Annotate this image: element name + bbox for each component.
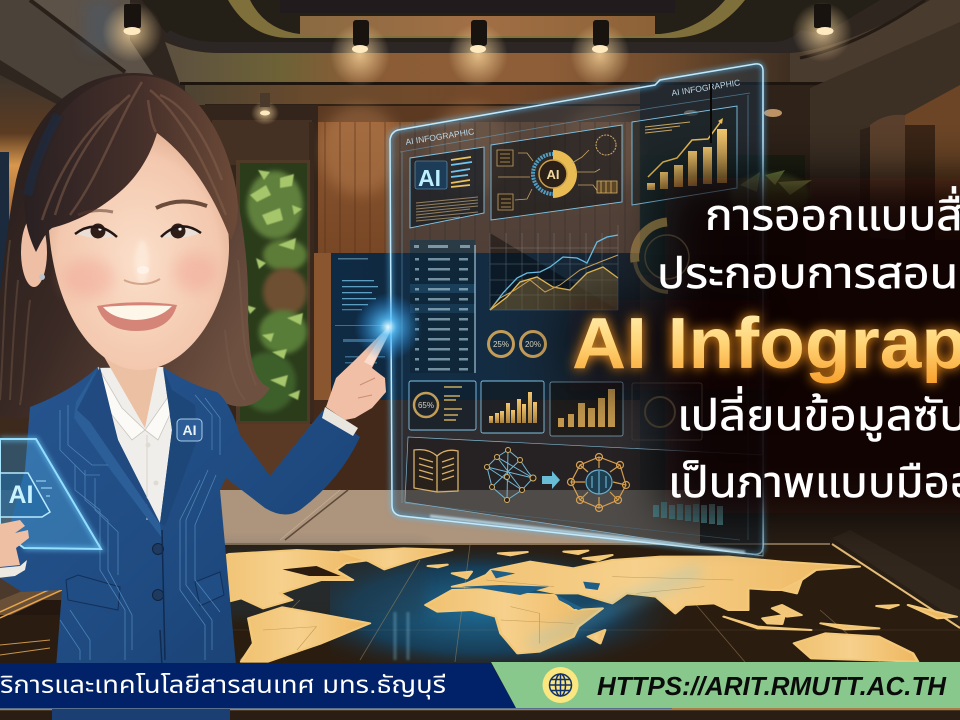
panel: website bbox=[491, 662, 960, 708]
world map bbox=[205, 530, 960, 663]
AI badge: AI bbox=[182, 422, 196, 438]
circuit pattern bbox=[60, 395, 220, 660]
fringe bbox=[25, 76, 238, 252]
pockets bbox=[66, 575, 120, 610]
donut gauges bbox=[488, 332, 546, 356]
icon: brain network bbox=[568, 454, 630, 512]
icon: globe bbox=[542, 667, 578, 703]
dim ring gauge bbox=[632, 222, 702, 440]
large wall screen bbox=[331, 253, 651, 400]
data table bbox=[410, 240, 475, 373]
panel: AI summary: AI bbox=[418, 165, 441, 191]
floor bbox=[0, 490, 960, 720]
panel: donut stat bbox=[409, 381, 476, 430]
presenter bbox=[0, 73, 422, 720]
dashboard labels: AI INFOGRAPHIC bbox=[671, 77, 741, 98]
pointing hand bbox=[322, 327, 390, 436]
panel: AI core diagram: AI bbox=[546, 167, 560, 182]
bottom process strip bbox=[405, 437, 763, 556]
held AI hologram: AI bbox=[8, 481, 34, 509]
panel: bar chart one bbox=[481, 381, 544, 433]
lapels bbox=[74, 367, 162, 538]
icon: open book bbox=[414, 450, 458, 492]
wood slats bbox=[325, 122, 640, 253]
arrow bbox=[542, 471, 560, 489]
panel: website: HTTPS://ARIT.RMUTT.AC.TH bbox=[597, 671, 947, 701]
ceiling recess bbox=[142, 0, 880, 42]
continents bbox=[210, 548, 957, 662]
panel: bar chart two bbox=[550, 382, 623, 436]
panel: donut stat: 65% bbox=[418, 401, 434, 410]
title bbox=[572, 186, 960, 507]
plant wall bbox=[236, 160, 310, 424]
footer bar bbox=[0, 662, 960, 720]
dashboard labels: AI INFOGRAPHIC bbox=[405, 126, 475, 147]
panel: AI summary bbox=[410, 147, 484, 228]
nose bbox=[124, 279, 160, 284]
line chart bbox=[490, 225, 618, 310]
eyebrows bbox=[78, 211, 113, 215]
dashboard labels bbox=[405, 77, 741, 147]
shirt bbox=[98, 367, 172, 523]
ceiling lights bbox=[102, 2, 852, 195]
plant window right bbox=[640, 155, 812, 275]
held AI hologram bbox=[0, 439, 101, 549]
mini bar chart bbox=[653, 502, 723, 525]
left hand bbox=[0, 520, 29, 578]
eyes bbox=[77, 228, 116, 238]
donut gauges: 25% bbox=[493, 340, 509, 349]
dark text backdrop bbox=[570, 178, 960, 513]
right corridor bbox=[684, 22, 960, 240]
smile bbox=[97, 302, 177, 331]
face bbox=[21, 76, 238, 370]
back monitor text bbox=[335, 258, 390, 364]
suit jacket bbox=[0, 355, 360, 720]
hair back bbox=[0, 73, 270, 418]
artifact line bbox=[710, 83, 712, 143]
AI badge bbox=[177, 419, 202, 441]
panel: department bbox=[0, 663, 516, 708]
holographic dashboard bbox=[390, 64, 763, 556]
panel: growth bar chart bbox=[632, 106, 737, 205]
donut gauges: 20% bbox=[525, 340, 541, 349]
panel: AI core diagram bbox=[491, 125, 622, 220]
icon: neural network bbox=[484, 448, 536, 502]
buttons bbox=[152, 544, 164, 554]
